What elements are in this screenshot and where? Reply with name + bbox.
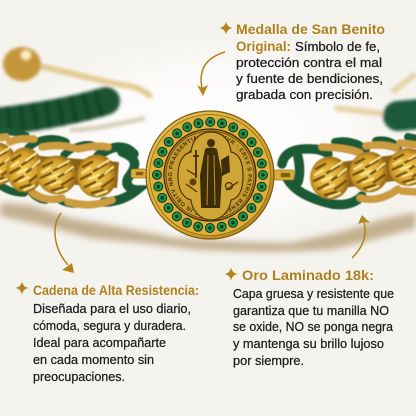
green cords xyxy=(0,131,137,204)
green cords xyxy=(282,137,416,205)
description: grabada con precisión. xyxy=(236,87,373,102)
callout: cadena xyxy=(16,282,199,384)
description: Diseñada para el uso diario, xyxy=(33,301,191,316)
left chain xyxy=(0,131,137,205)
star icon xyxy=(16,282,28,294)
inner disc xyxy=(179,144,241,206)
heading: Oro Laminado 18k: xyxy=(242,267,374,283)
arrow: to medal xyxy=(197,52,225,96)
medal inscription xyxy=(172,137,248,213)
description: Símbolo de fe, xyxy=(295,39,380,54)
description: preocupaciones. xyxy=(33,369,125,384)
left connector xyxy=(131,169,146,178)
blurred bracelet back right xyxy=(335,74,416,116)
star icon xyxy=(224,268,238,280)
table shadow band xyxy=(0,203,416,252)
blurred bracelet back left xyxy=(0,47,150,130)
gold thread xyxy=(38,66,150,98)
emerald ring xyxy=(157,122,263,228)
right connector xyxy=(274,170,294,180)
green rope xyxy=(398,114,416,116)
green rope xyxy=(0,101,106,122)
arrow: to chain xyxy=(55,213,74,273)
description: garantiza que tu manilla NO xyxy=(233,303,389,318)
dark backing xyxy=(0,166,118,175)
description: cómoda, segura y duradera. xyxy=(33,318,186,333)
description xyxy=(233,286,394,368)
heading: Cadena de Alta Resistencia: xyxy=(33,282,199,298)
background glow xyxy=(0,20,416,260)
gold netted chain xyxy=(0,137,112,205)
arrow: to gold beads xyxy=(352,215,370,258)
medal: San Benito xyxy=(145,110,275,240)
description: en cada momento sin xyxy=(33,352,154,367)
gold thread xyxy=(335,74,416,115)
star icon xyxy=(220,22,232,34)
right chain xyxy=(282,137,416,205)
rim xyxy=(146,111,274,239)
description xyxy=(236,39,383,102)
gold netted chain xyxy=(322,143,416,199)
right beads xyxy=(310,148,416,200)
gold ball xyxy=(3,47,41,81)
description: por siempre. xyxy=(233,353,304,368)
dark backing xyxy=(320,165,416,178)
description: y fuente de bendiciones, xyxy=(236,71,383,86)
description: se oxide, NO se ponga negra xyxy=(233,319,394,334)
medal: San Benito: EIVS IN OBITV NRO PRAESENTIA MVNIAMVR · CRVX S PATRIS BENEDICTI xyxy=(168,134,252,215)
description: Capa gruesa y resistente que xyxy=(233,286,394,301)
callout: medalla xyxy=(220,21,385,102)
heading: Medalla de San Benito xyxy=(236,21,385,37)
inner band xyxy=(164,129,256,221)
quatrefoil xyxy=(178,132,243,220)
description xyxy=(33,301,191,384)
description: y mantenga su brillo lujoso xyxy=(233,336,384,351)
saint figure xyxy=(186,139,238,208)
callout: oro xyxy=(224,267,394,368)
rope shadow xyxy=(70,118,145,130)
description: Ideal para acompañarte xyxy=(33,335,166,350)
left beads xyxy=(0,142,117,198)
description: protección contra el mal xyxy=(236,55,382,70)
heading continuation: Original: xyxy=(236,38,291,54)
